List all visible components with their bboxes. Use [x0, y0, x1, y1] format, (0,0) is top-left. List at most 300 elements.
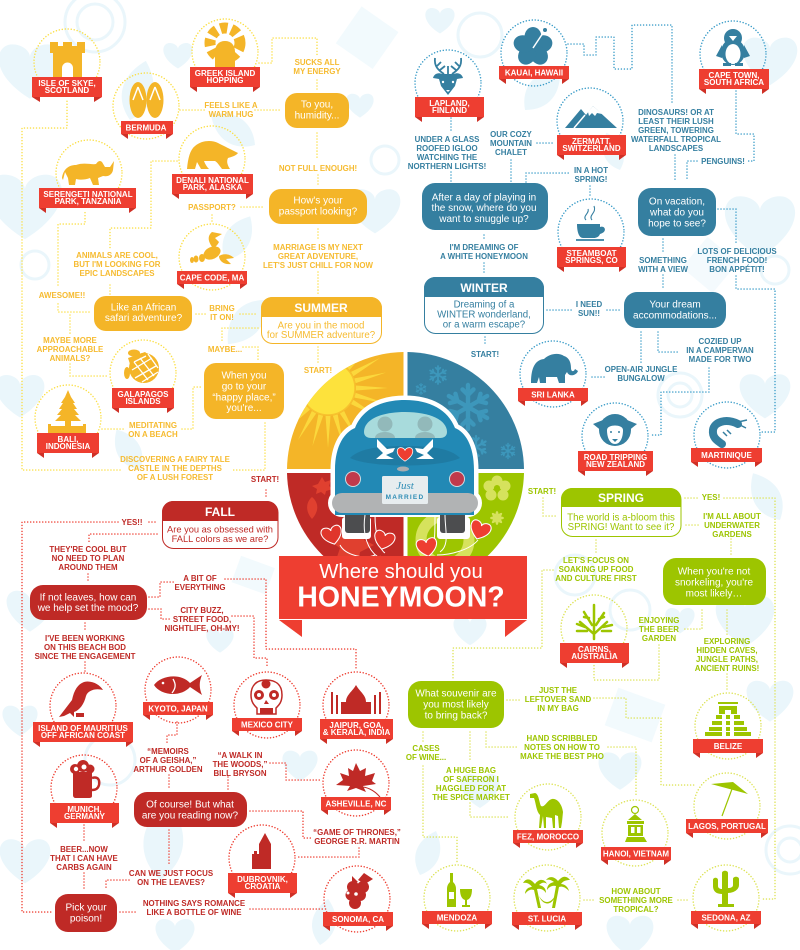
- summer answer labels: OF A LUSH FOREST: [137, 473, 213, 482]
- banner: Road Tripping: [578, 451, 653, 476]
- summer answer labels: MAYBE MORE: [43, 336, 97, 345]
- question: accommodations: Your dream: [649, 300, 701, 310]
- icon: elephant: [531, 354, 578, 383]
- banner: Zermatt: SWITZERLAND: [562, 144, 621, 153]
- location: Belize: [693, 693, 763, 759]
- question: humidity: [285, 93, 349, 128]
- spring answer labels: JUNGLE PATHS,: [696, 655, 758, 664]
- title: second line: HONEYMOON?: [297, 582, 505, 614]
- banner: Fez: FEZ, MOROCCO: [517, 832, 579, 842]
- question: winter: [424, 277, 544, 334]
- location: Isle of Skye: [32, 29, 102, 102]
- banner: Kyoto: KYOTO, JAPAN: [148, 704, 208, 714]
- icon: sugar skull: [251, 680, 282, 714]
- location: Bali: [35, 385, 101, 458]
- question: safari: safari adventure?: [105, 313, 183, 324]
- winter answer labels: IN A CAMPERVAN: [686, 346, 754, 355]
- winter answer labels: OUR COZY: [490, 130, 533, 139]
- spring answer labels: THE BEER: [639, 625, 679, 634]
- question: happy place: When you: [221, 370, 267, 382]
- fall answer labels: SINCE THE ENGAGEMENT: [35, 652, 136, 661]
- banner: Cairns: AUSTRALIA: [571, 652, 618, 661]
- fall answer labels: ON THIS BEACH BOD: [44, 643, 126, 652]
- connectors: summer flow: [22, 38, 318, 470]
- location: Steamboat Springs: [557, 199, 626, 272]
- location: Jaipur: [320, 672, 393, 744]
- icon: maple leaf: [336, 763, 380, 797]
- question: reading: are you reading now?: [142, 810, 239, 822]
- spring answer labels: LET'S FOCUS ON: [563, 556, 629, 565]
- question: safari: [94, 296, 192, 331]
- fall answer labels: OF A GEISHA,”: [140, 756, 196, 765]
- summer answer labels: ANIMALS ARE COOL,: [76, 251, 158, 260]
- summer answer labels: BRING: [209, 304, 235, 313]
- summer answer labels: MY ENERGY: [293, 67, 341, 76]
- spring answer labels: ENJOYING: [639, 616, 679, 625]
- banner: Mauritius: OFF AFRICAN COAST: [41, 731, 125, 740]
- winter answer labels: ROOFED IGLOO: [416, 144, 478, 153]
- winter answer labels: FRENCH FOOD!: [707, 256, 767, 265]
- banner: Galapagos: GALAPAGOS: [118, 390, 169, 399]
- winter answer labels: NORTHERN LIGHTS!: [408, 162, 486, 171]
- question: summer: for SUMMER adventure?: [267, 330, 376, 341]
- fall answer labels: CITY BUZZ,: [180, 606, 224, 615]
- question: fall: FALL: [205, 505, 235, 519]
- winter answer labels: SPRING!: [575, 175, 607, 184]
- title banner: [279, 556, 527, 637]
- spring answer labels: GARDENS: [712, 530, 752, 539]
- question: souvenir: What souvenir are: [415, 688, 497, 700]
- fall answer labels: THEY'RE COOL BUT: [49, 545, 127, 554]
- icon: tower: [252, 833, 271, 869]
- spring answer labels: OF WINE...: [406, 753, 446, 762]
- banner: Dubrovnik: [228, 873, 297, 898]
- banner: Mexico City: MEXICO CITY: [241, 720, 294, 730]
- wheel quadrant: fall leaves: [287, 473, 404, 556]
- question: fall: [162, 501, 278, 548]
- fall answer labels: EVERYTHING: [174, 583, 226, 592]
- question: passport: [269, 189, 367, 224]
- winter answer labels: I'M DREAMING OF: [450, 243, 519, 252]
- spring answer labels: START!: [528, 487, 556, 496]
- question: accommodations: [624, 292, 726, 328]
- banner: Steamboat Springs: SPRINGS, CO: [565, 256, 618, 265]
- banner: Isle of Skye: ISLE OF SKYE,: [38, 79, 96, 88]
- winter answer labels: OPEN-AIR JUNGLE: [605, 365, 677, 374]
- spring answer labels: HAGGLED FOR AT: [436, 784, 506, 793]
- spring answer labels: ANCIENT RUINS!: [695, 664, 759, 673]
- icon: bear: [187, 141, 238, 169]
- spring answer labels: AND CULTURE FIRST: [555, 574, 637, 583]
- license plate: MARRIED: [386, 494, 424, 501]
- question: happy place: go to your: [222, 382, 267, 392]
- location: Hanoi: [601, 800, 671, 866]
- location: Dubrovnik: [228, 825, 297, 898]
- question: safari: Like an African: [111, 302, 176, 314]
- spring answer labels: HOW ABOUT: [611, 887, 661, 896]
- winter answer labels: COZIED UP: [699, 337, 741, 346]
- winter answer labels: DINOSAURS! OR AT: [638, 108, 714, 117]
- spring answer labels: JUST THE: [539, 686, 577, 695]
- question: winter: Dreaming of a: [454, 300, 515, 310]
- fall answer labels: THAT I CAN HAVE: [50, 854, 118, 863]
- question: winter: or a warm escape?: [443, 320, 526, 330]
- question: snuggle: After a day of playing in: [432, 192, 536, 204]
- location: Lagos: [686, 773, 768, 839]
- question: fall: FALL colors as we are?: [172, 534, 268, 544]
- banner: Serengeti: SERENGETI NATIONAL: [43, 190, 133, 199]
- question: winter: WINTER wonderland,: [437, 310, 531, 320]
- fall answer labels: STREET FOOD,: [173, 615, 231, 624]
- winter answer labels: LOTS OF DELICIOUS: [697, 247, 777, 256]
- icon: coral: [577, 605, 612, 639]
- icon: reindeer: [433, 58, 463, 95]
- location: St. Lucia: [512, 865, 582, 931]
- fall answer labels: BILL BRYSON: [213, 769, 267, 778]
- location: Sedona: [691, 865, 761, 931]
- banner: Lapland: [415, 97, 484, 122]
- icon: beer mug: [70, 760, 99, 798]
- heart balloons: [320, 515, 492, 558]
- spring answer labels: EXPLORING: [704, 637, 750, 646]
- summer answer labels: MEDITATING: [129, 421, 177, 430]
- location: Bermuda: [113, 73, 179, 139]
- summer answer labels: MAYBE...: [208, 345, 242, 354]
- banner: Denali: DENALI NATIONAL: [176, 176, 249, 185]
- icon: sheep: [593, 414, 637, 446]
- fall answer labels: GEORGE R.R. MARTIN: [314, 837, 400, 846]
- icon: toucan: [59, 682, 103, 717]
- icon: castle: [50, 42, 85, 78]
- banner: Cape Town: CAPE TOWN,: [709, 71, 759, 80]
- fall answer labels: CAN WE JUST FOCUS: [129, 869, 213, 878]
- banner: Mauritius: [33, 722, 133, 747]
- question: mood: If not leaves, how can: [40, 592, 136, 604]
- fall answer labels: YES!!: [121, 518, 143, 527]
- license plate: [382, 476, 428, 504]
- spring answer labels: LEFTOVER SAND: [525, 695, 592, 704]
- spring answer labels: OF SAFFRON I: [443, 775, 499, 784]
- question: happy place: “happy place,”: [212, 392, 276, 404]
- summer answer labels: PASSPORT?: [188, 203, 236, 212]
- banner: Bermuda: BERMUDA: [126, 124, 167, 132]
- fall answer labels: NOTHING SAYS ROMANCE: [143, 899, 245, 908]
- question: on vacation: [638, 188, 716, 236]
- summer answer labels: NOT FULL ENOUGH!: [279, 164, 357, 173]
- summer answer labels: ANIMALS?: [50, 354, 91, 363]
- honeymoon car: [330, 400, 480, 536]
- question: mood: [30, 585, 147, 620]
- icon: wine bottle and glass: [447, 873, 472, 907]
- question: souvenir: to bring back?: [425, 710, 488, 722]
- question: spring: [561, 488, 681, 536]
- question: snorkeling: When you're not: [678, 566, 750, 578]
- fall answer labels: AROUND THEM: [58, 563, 118, 572]
- summer answer labels: FEELS LIKE A: [204, 101, 258, 110]
- summer answer labels: AWESOME!!: [39, 291, 85, 300]
- question: spring: SPRING: [598, 491, 644, 505]
- fall answer labels: THE WOODS,”: [213, 760, 267, 769]
- location: Greek Island Hopping: [190, 19, 260, 92]
- banner: Lapland: FINLAND: [432, 106, 467, 115]
- icon: lantern: [625, 806, 647, 842]
- banner: Isle of Skye: SCOTLAND: [45, 86, 89, 95]
- banner: Bali: INDONESIA: [46, 442, 90, 451]
- winter answer labels: START!: [471, 350, 499, 359]
- connectors: fall flow: [22, 490, 359, 912]
- banner: Jaipur: JAIPUR, GOA,: [329, 721, 384, 730]
- question: on vacation: On vacation,: [649, 196, 705, 208]
- icon: dove right: [415, 439, 434, 459]
- wheel quadrant: spring flowers: [408, 473, 524, 556]
- banner: Dubrovnik: CROATIA: [245, 882, 281, 891]
- fall answer labels: START!: [251, 475, 279, 484]
- winter answer labels: SOMETHING: [639, 256, 687, 265]
- question: winter: WINTER: [460, 281, 508, 295]
- location: Kauai: [499, 20, 569, 86]
- winter answer labels: LANDSCAPES: [649, 144, 703, 153]
- banner: Kauai: KAUAI, HAWAII: [505, 68, 563, 78]
- banner: Galapagos: [112, 388, 174, 413]
- title: first line: Where should you: [319, 561, 483, 583]
- fall answer labels: NO NEED TO PLAN: [52, 554, 125, 563]
- question: on vacation: hope to see?: [648, 218, 706, 230]
- icon: grapes: [346, 873, 373, 909]
- winter answer labels: WATCHING THE: [417, 153, 477, 162]
- banner: Lagos: LAGOS, PORTUGAL: [688, 822, 766, 831]
- banner: Jaipur: & KERALA, INDIA: [323, 728, 390, 737]
- winter answer labels: LEAST THEIR LUSH: [638, 117, 714, 126]
- winter answer labels: PENGUINS!: [701, 157, 745, 166]
- summer answer labels: DISCOVERING A FAIRY TALE: [120, 455, 230, 464]
- banner: Greek Island Hopping: HOPPING: [207, 76, 243, 85]
- spring answer labels: NOTES ON HOW TO: [524, 743, 600, 752]
- location: Road Tripping New Zealand: [578, 403, 653, 476]
- question: humidity: humidity...: [295, 110, 339, 122]
- winter answer labels: IN A HOT: [574, 166, 608, 175]
- fall answer labels: I'VE BEEN WORKING: [45, 634, 125, 643]
- location: Mauritius: [33, 673, 133, 747]
- question: reading: [134, 792, 247, 827]
- icon: fish: [154, 675, 202, 695]
- question: humidity: To you,: [301, 100, 333, 110]
- fall answer labels: LIKE A BOTTLE OF WINE: [147, 908, 241, 917]
- spring answer labels: SOMETHING MORE: [599, 896, 673, 905]
- banner: Steamboat Springs: STEAMBOAT: [566, 249, 617, 258]
- summer answer labels: WARM HUG: [209, 110, 253, 119]
- location: Denali: [172, 126, 253, 199]
- question: snuggle: the snow, where do you: [431, 203, 537, 214]
- banner: Mauritius: ISLAND OF MAURITIUS: [38, 724, 129, 733]
- spring answer labels: [406, 487, 761, 914]
- banner: Sonoma: SONOMA, CA: [332, 915, 384, 924]
- license plate: Just: [396, 480, 415, 492]
- question: snuggle: [422, 183, 548, 230]
- icon: mountains: [565, 106, 617, 128]
- location: Lapland: [415, 50, 484, 122]
- spring answer labels: MAKE THE BEST PHO: [520, 752, 604, 761]
- winter answer labels: MOUNTAIN: [490, 139, 532, 148]
- banner: Cape Cod: CAPE CODE, MA: [180, 274, 244, 282]
- location: Sri Lanka: [518, 341, 588, 407]
- question: poison: poison!: [70, 914, 102, 924]
- summer answer labels: CASTLE IN THE DEPTHS: [128, 464, 222, 473]
- question: snorkeling: most likely…: [686, 588, 742, 600]
- location: Mendoza: [422, 865, 492, 931]
- spring answer labels: HAND SCRIBBLED: [526, 734, 598, 743]
- banner: Munich: MUNICH,: [67, 805, 102, 814]
- location: Cairns: [560, 595, 629, 668]
- connectors: spring flow: [423, 498, 775, 900]
- question: passport: How's your: [293, 196, 343, 206]
- icon: dove left: [376, 439, 395, 459]
- banner: Greek Island Hopping: [190, 67, 260, 92]
- winter answer labels: WITH A VIEW: [638, 265, 688, 274]
- banner: Denali: PARK, ALASKA: [183, 183, 242, 192]
- question: snorkeling: snorkeling, you're: [675, 578, 753, 588]
- question: snuggle: want to snuggle up?: [438, 214, 529, 225]
- winter answer labels: UNDER A GLASS: [415, 135, 479, 144]
- location: Munich: [50, 755, 119, 828]
- question: fall: Are you as obsessed with: [167, 524, 273, 534]
- banner: Asheville: ASHEVILLE, NC: [326, 800, 387, 808]
- summer answer labels: APPROACHABLE: [37, 345, 103, 354]
- location: Galapagos: [110, 340, 176, 413]
- banner: Belize: BELIZE: [714, 742, 743, 751]
- icon: palm trees and hammock: [523, 877, 570, 908]
- banner: Martinique: MARTINIQUE: [701, 451, 752, 460]
- banner: Cape Town: SOUTH AFRICA: [704, 78, 764, 87]
- banner: Zermatt: ZERMATT,: [572, 137, 611, 146]
- question: summer: Are you in the mood: [278, 320, 364, 332]
- icon: beach umbrella: [711, 782, 748, 816]
- spring answer labels: GARDEN: [642, 634, 676, 643]
- wheel quadrant: summer sun: [287, 352, 404, 469]
- fall answer labels: ON THE LEAVES?: [137, 878, 205, 887]
- location: Sonoma: [323, 866, 393, 932]
- fall answer labels: ARTHUR GOLDEN: [133, 765, 203, 774]
- banner: Lapland: LAPLAND,: [429, 99, 470, 108]
- question: reading: Of course! But what: [146, 800, 234, 810]
- icon: car heart: [397, 448, 413, 461]
- icon: cactus: [713, 871, 739, 907]
- banner: Bali: BALI,: [58, 435, 78, 444]
- fall answer labels: CARBS AGAIN: [56, 863, 112, 872]
- banner: Dubrovnik: DUBROVNIK,: [237, 875, 288, 884]
- spring answer labels: I'M ALL ABOUT: [703, 512, 761, 521]
- summer answer labels: [37, 58, 374, 482]
- banner: Munich: [50, 803, 119, 828]
- icon: turtle: [124, 350, 159, 383]
- banner: Sedona: SEDONA, AZ: [701, 914, 751, 922]
- banner: Sri Lanka: SRI LANKA: [531, 390, 575, 400]
- seasonal wheel: [287, 352, 524, 556]
- spring answer labels: THE SPICE MARKET: [432, 793, 510, 802]
- question: souvenir: [408, 681, 504, 728]
- icon: hibiscus: [511, 27, 555, 68]
- spring answer labels: HIDDEN CAVES,: [696, 646, 758, 655]
- fall answer labels: NIGHTLIFE, OH-MY!: [165, 624, 239, 633]
- location: Martinique: [691, 402, 762, 468]
- location: Serengeti: [39, 140, 136, 213]
- question: spring: The world is a-bloom this: [567, 512, 675, 524]
- banner: Cairns: [560, 643, 629, 668]
- icon: pagoda: [48, 390, 86, 433]
- location: Cape Town: [699, 21, 769, 94]
- location: Cape Cod: [177, 224, 247, 290]
- spring answer labels: UNDERWATER: [704, 521, 760, 530]
- icon: penguin: [716, 29, 750, 66]
- question: poison: [55, 894, 117, 932]
- icon: coffee cup: [576, 206, 605, 240]
- summer answer labels: GREAT ADVENTURE,: [278, 252, 358, 261]
- summer answer labels: LET'S JUST CHILL FOR NOW: [263, 261, 374, 270]
- spring answer labels: YES!: [702, 493, 720, 502]
- banner: Serengeti: [39, 188, 136, 213]
- icon: shrimp: [713, 420, 747, 444]
- question: on vacation: what do you: [649, 208, 704, 218]
- winter answer labels: GREEN, TOWERING: [638, 126, 714, 135]
- summer answer labels: BUT I'M LOOKING FOR: [74, 260, 161, 269]
- fall answer labels: A BIT OF: [183, 574, 217, 583]
- question: spring: SPRING! Want to see it?: [568, 522, 675, 533]
- location: Mexico City: [232, 672, 302, 738]
- spring answer labels: A HUGE BAG: [446, 766, 496, 775]
- banner: Mendoza: MENDOZA: [437, 914, 477, 922]
- fall answer labels: BEER...NOW: [60, 845, 108, 854]
- banner: Munich: GERMANY: [64, 812, 106, 821]
- icon: flip flops: [130, 82, 164, 118]
- banner: Hanoi: HANOI, VIETNAM: [603, 850, 669, 858]
- banner: Cape Town: [699, 69, 769, 94]
- winter answer labels: A WHITE HONEYMOON: [440, 252, 528, 261]
- location: Zermatt: [557, 88, 626, 160]
- banner: Road Tripping: NEW ZEALAND: [586, 460, 645, 469]
- summer answer labels: SUCKS ALL: [295, 58, 340, 67]
- connectors: winter flow: [451, 25, 775, 435]
- question: summer: SUMMER: [294, 301, 348, 315]
- question: passport: passport looking?: [279, 206, 358, 218]
- icon: taj mahal: [331, 685, 381, 714]
- spring answer labels: TROPICAL?: [613, 905, 659, 914]
- icon: mayan pyramid: [705, 702, 751, 736]
- banner: Isle of Skye: [32, 77, 102, 102]
- summer answer labels: EPIC LANDSCAPES: [80, 269, 154, 278]
- summer answer labels: MARRIAGE IS MY NEXT: [273, 243, 363, 252]
- winter answer labels: MADE FOR TWO: [689, 355, 751, 364]
- banner: Denali: [172, 174, 253, 199]
- fall answer labels: “GAME OF THRONES,”: [313, 828, 401, 837]
- fall answer labels: “A WALK IN: [218, 751, 263, 760]
- wheel quadrant: winter snowflakes: [408, 352, 524, 469]
- winter answer labels: CHALET: [495, 148, 527, 157]
- location: Asheville: [321, 750, 391, 816]
- winter answer labels: BON APPÉTIT!: [709, 265, 765, 274]
- question: souvenir: you most likely: [423, 700, 489, 710]
- question: happy place: you're...: [226, 403, 262, 414]
- banner: Steamboat Springs: [557, 247, 626, 272]
- question: happy place: [204, 363, 284, 419]
- question: summer: [261, 297, 382, 344]
- icon: windmill: [210, 28, 240, 68]
- spring answer labels: SOAKING UP FOOD: [559, 565, 634, 574]
- winter answer labels: BUNGALOW: [617, 374, 665, 383]
- summer answer labels: IT ON!: [210, 313, 234, 322]
- summer answer labels: START!: [304, 366, 332, 375]
- question: accommodations: accommodations...: [633, 310, 717, 322]
- location: Kyoto: [143, 657, 213, 723]
- banner: Bali: [37, 433, 99, 458]
